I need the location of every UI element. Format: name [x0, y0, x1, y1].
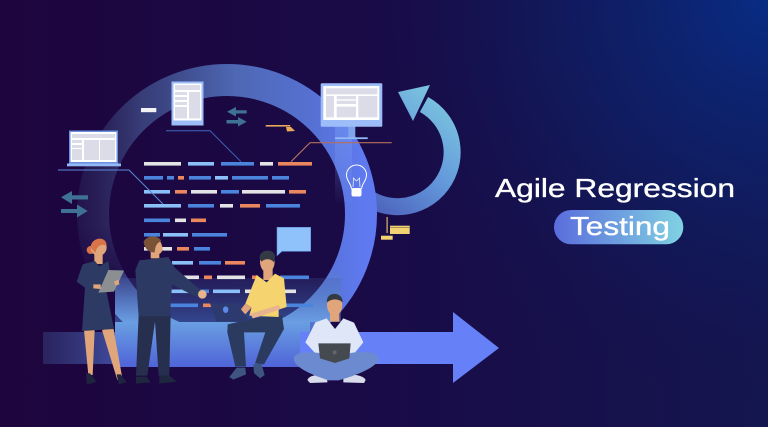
icon: light bulb [346, 165, 366, 196]
pill label: Testing [554, 210, 683, 244]
icon: swap arrows near laptop [61, 191, 88, 218]
connector line from laptop [58, 170, 163, 204]
connector line from tablet [166, 131, 241, 162]
large circular ring [93, 80, 361, 348]
translucent panel behind the code lines [115, 278, 341, 322]
white dash [141, 108, 156, 112]
connector line from monitor [291, 143, 392, 162]
code lines [144, 162, 313, 307]
yellow key mark [381, 217, 410, 240]
curved return arrow [352, 85, 452, 207]
icon: laptop [67, 130, 121, 166]
person: woman with tablet [77, 239, 127, 384]
ring lower section [115, 270, 341, 322]
person: man sitting cross-legged with laptop [294, 294, 379, 383]
icon: tablet document [172, 82, 204, 126]
icon: swap arrows near tablet [226, 107, 247, 126]
horizontal progress arrow [43, 312, 499, 383]
title: Agile Regression [495, 173, 735, 203]
icon: desktop monitor [321, 83, 382, 139]
orange key mark [266, 125, 295, 132]
person: man in suit [135, 236, 207, 384]
pill label: Testing: Testing [570, 211, 670, 241]
person: man in yellow shirt with laptop [210, 251, 287, 380]
speech bubble [277, 227, 311, 256]
